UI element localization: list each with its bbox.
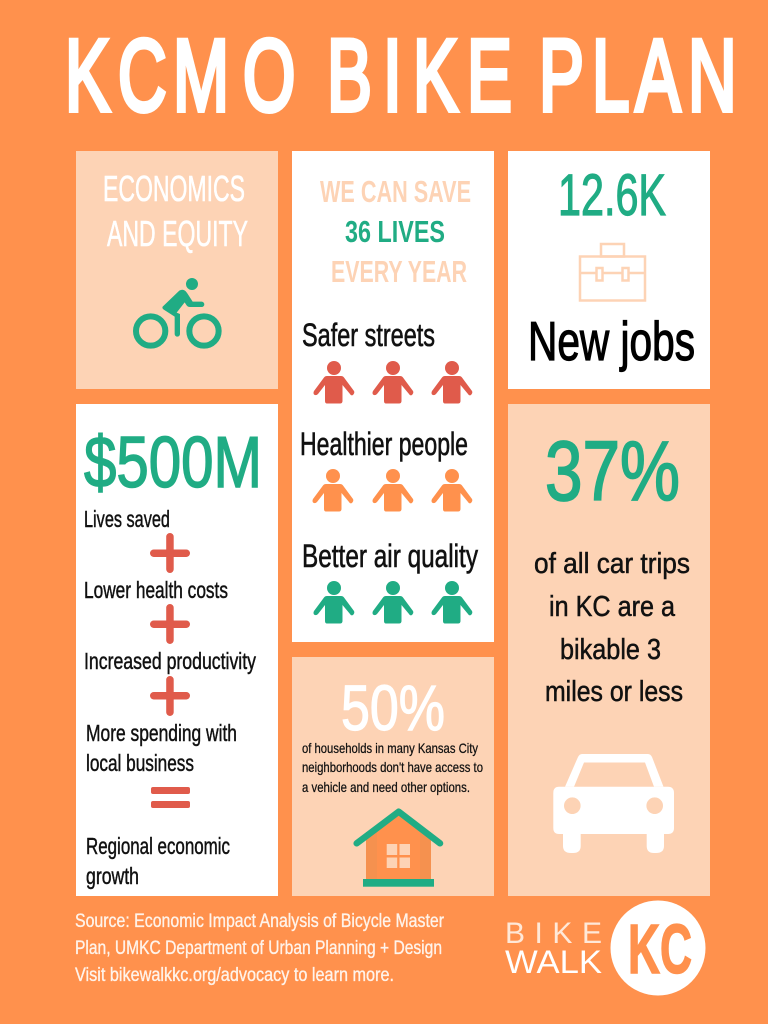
logo: BikeWalkKC: WALK [505,944,602,980]
description: a vehicle and need other options. [302,779,470,795]
icons: red people [314,361,472,404]
panel: economics and equity [76,151,278,389]
source text [75,911,445,986]
equation text: local business [86,750,194,776]
panel: new jobs [508,151,710,389]
equation text [84,506,256,889]
label: safer streets: Safer streets [302,317,435,353]
description: bikable 3 [560,634,661,666]
description: miles or less [545,676,683,708]
label: new jobs: New jobs [528,310,695,372]
equation text: growth [86,863,139,889]
description: of all car trips [534,548,690,580]
equation text: Lives saved [84,506,170,532]
description [302,740,483,795]
heading: economics and equity [103,168,248,254]
description [534,548,690,708]
icon: car [553,754,674,853]
equation text: More spending with [86,720,237,746]
title: KCMO BIKE PLAN [65,20,737,133]
stat: 37%: 37% [545,424,680,518]
stat: 50%: 50% [341,672,445,744]
panel: bikable car trips [508,404,710,896]
logo: BikeWalkKC [505,900,706,996]
panel: economic impact [76,404,278,896]
heading: we can save 36 lives every year: WE CAN SAVE [320,174,471,209]
icons: plus and equals signs [150,533,190,808]
icons: orange people [312,469,472,512]
description: in KC are a [549,591,676,623]
heading: we can save 36 lives every year [320,174,471,289]
stat: 12.6K: 12.6K [558,163,666,228]
heading: we can save 36 lives every year: 36 LIVES [345,214,445,249]
heading: we can save 36 lives every year: EVERY YEAR [331,254,467,289]
description: neighborhoods don't have access to [302,759,483,775]
logo: BikeWalkKC: BIKE [505,917,602,950]
icons: green people [314,581,472,624]
label: healthier people: Healthier people [300,426,468,462]
icon: house [357,812,440,887]
heading: economics and equity: AND EQUITY [107,213,248,254]
logo: BikeWalkKC: KC [628,910,692,988]
equation text: Increased productivity [84,648,256,674]
source text: Source: Economic Impact Analysis of Bicycle Master [75,911,445,932]
icon: briefcase [580,244,645,300]
description: of households in many Kansas City [302,740,478,756]
heading: economics and equity: ECONOMICS [103,168,245,209]
equation text: Regional economic [86,833,230,859]
panel: households without vehicles [292,657,494,896]
equation text: Lower health costs [84,577,228,603]
source text: Plan, UMKC Department of Urban Planning + Design [75,938,442,959]
label: better air quality: Better air quality [302,538,478,574]
source text: Visit bikewalkkc.org/advocacy to learn more. [75,965,394,986]
icon: cyclist [136,278,219,346]
stat: $500M: $500M [84,423,262,503]
panel: lives saved [292,151,494,642]
